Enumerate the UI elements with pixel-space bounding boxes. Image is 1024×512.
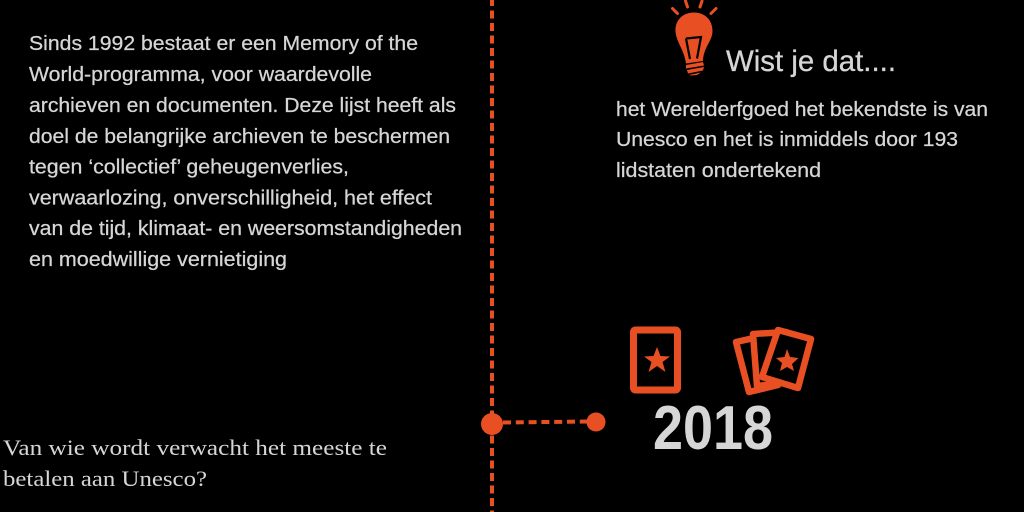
text block: Werelderfgoed: het Werelderfgoed het bekendste is van xyxy=(616,99,988,121)
timeline connector with dots xyxy=(481,412,606,435)
text block: Memory of the World: doel de belangrijke archieven te beschermen xyxy=(29,126,450,148)
text block: Memory of the World: Sinds 1992 bestaat er een Memory of the xyxy=(29,33,418,55)
text block: Memory of the World xyxy=(29,33,462,271)
text block: Werelderfgoed: lidstaten ondertekend xyxy=(616,160,821,182)
year label: 2018 xyxy=(653,394,773,463)
text block: Memory of the World: en moedwillige vernietiging xyxy=(29,249,287,271)
question text: betalen aan Unesco? xyxy=(3,466,207,491)
text block: Werelderfgoed xyxy=(616,99,988,182)
text block: Memory of the World: van de tijd, klimaat- en weersomstandigheden xyxy=(29,218,462,240)
timeline: vertical dashed line xyxy=(490,0,494,512)
icon: single card xyxy=(634,330,678,390)
icon: light bulb xyxy=(672,1,716,76)
question text: Van wie wordt verwacht het meeste te xyxy=(3,435,387,460)
text block: Werelderfgoed: Unesco en het is inmiddels door 193 xyxy=(616,129,958,151)
question text xyxy=(3,435,387,491)
text block: Memory of the World: tegen ‘collectief’ geheugenverlies, xyxy=(29,156,349,178)
heading: Wist je dat: Wist je dat.... xyxy=(726,45,896,78)
text block: Memory of the World: archieven en documenten. Deze lijst heeft als xyxy=(29,95,456,117)
text block: Memory of the World: World-programma, voor waardevolle xyxy=(29,64,372,86)
icon: fanned cards xyxy=(736,330,811,392)
text block: Memory of the World: verwaarlozing, onverschilligheid, het effect xyxy=(29,188,432,210)
